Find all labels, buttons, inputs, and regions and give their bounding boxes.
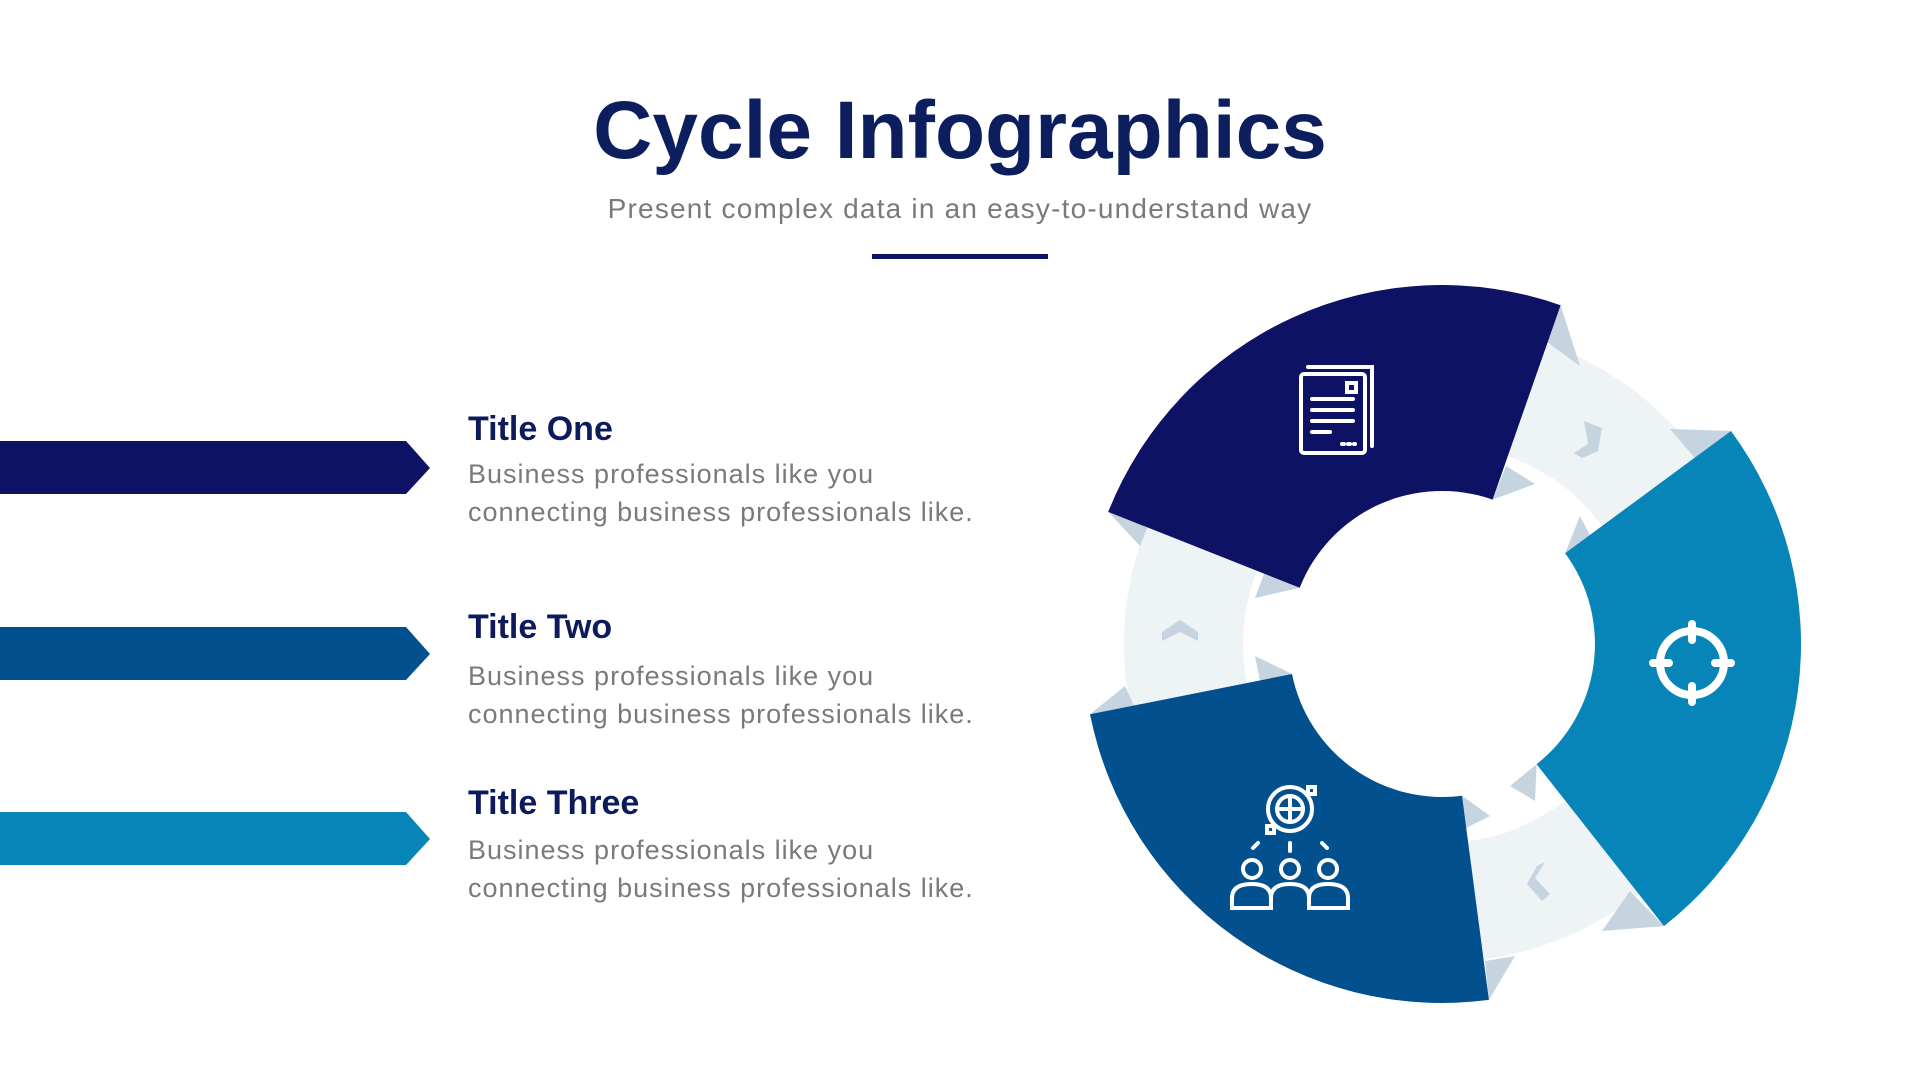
underline — [872, 254, 1048, 259]
text block 3: Business professionals like you — [468, 835, 874, 865]
title: Cycle Infographics — [593, 85, 1327, 176]
arrow bar 1 — [0, 441, 430, 494]
text block 3: connecting business professionals like. — [468, 873, 974, 903]
arrow bar 2 — [0, 627, 430, 680]
arrow bar 3 — [0, 812, 430, 865]
text block 1 — [468, 410, 974, 527]
text block 2: connecting business professionals like. — [468, 699, 974, 729]
text block 1: Business professionals like you — [468, 459, 874, 489]
subtitle: Present complex data in an easy-to-understand way — [608, 193, 1312, 224]
text block 3 — [468, 784, 974, 903]
shadow triangles — [1090, 305, 1731, 1000]
icon: document — [1301, 367, 1372, 453]
text block 1: Title One — [468, 410, 613, 448]
icon: people globe — [1232, 787, 1348, 908]
text block 2 — [468, 608, 974, 729]
gray connector ring — [1124, 326, 1760, 962]
segment: mid blue — [1090, 674, 1489, 1003]
icon: target — [1653, 624, 1731, 702]
segment: teal — [1537, 431, 1801, 926]
chevrons — [1162, 421, 1602, 901]
segment: navy — [1108, 285, 1561, 588]
text block 2: Business professionals like you — [468, 661, 874, 691]
text block 2: Title Two — [468, 608, 612, 646]
text block 1: connecting business professionals like. — [468, 497, 974, 527]
text block 3: Title Three — [468, 784, 639, 822]
